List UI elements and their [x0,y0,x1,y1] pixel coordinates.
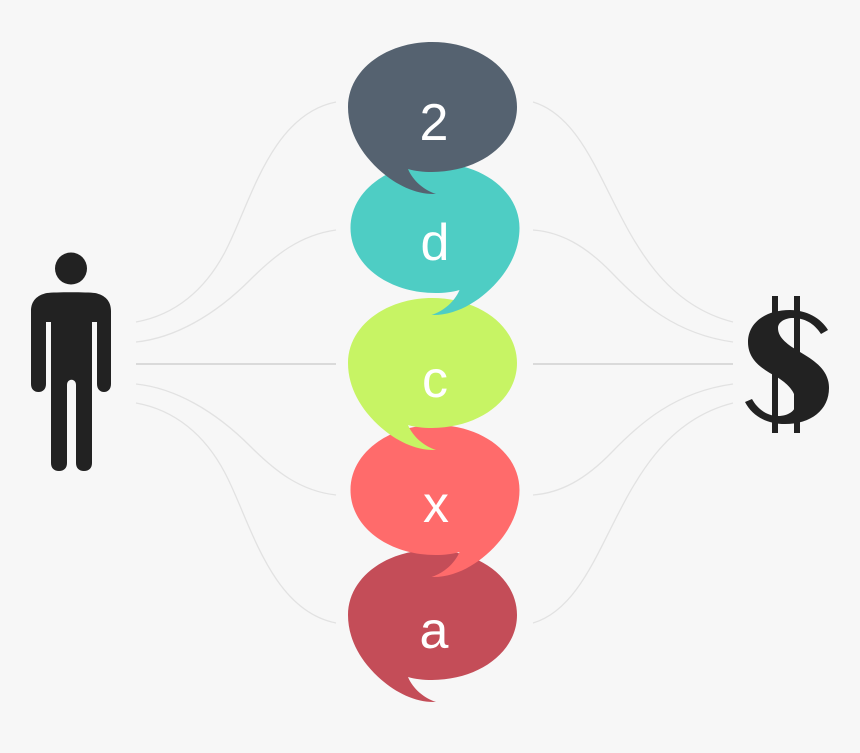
speech bubble: 2 [348,42,517,194]
icon: dollar sign: $ [750,282,826,448]
speech bubble: c [348,298,517,450]
speech bubble: x: x [423,476,449,534]
connector lines: bubbles to dollar [533,102,733,623]
speech bubble: 2: 2 [420,94,448,152]
speech bubble: d [350,163,520,315]
speech bubble: a [348,550,517,702]
connector lines: person to bubbles [136,102,336,623]
speech bubble: d: d [421,214,449,272]
icon: person [31,252,111,471]
speech bubble: c: c [422,351,448,409]
speech bubble: a: a [420,602,449,660]
speech bubble: x [350,425,520,577]
